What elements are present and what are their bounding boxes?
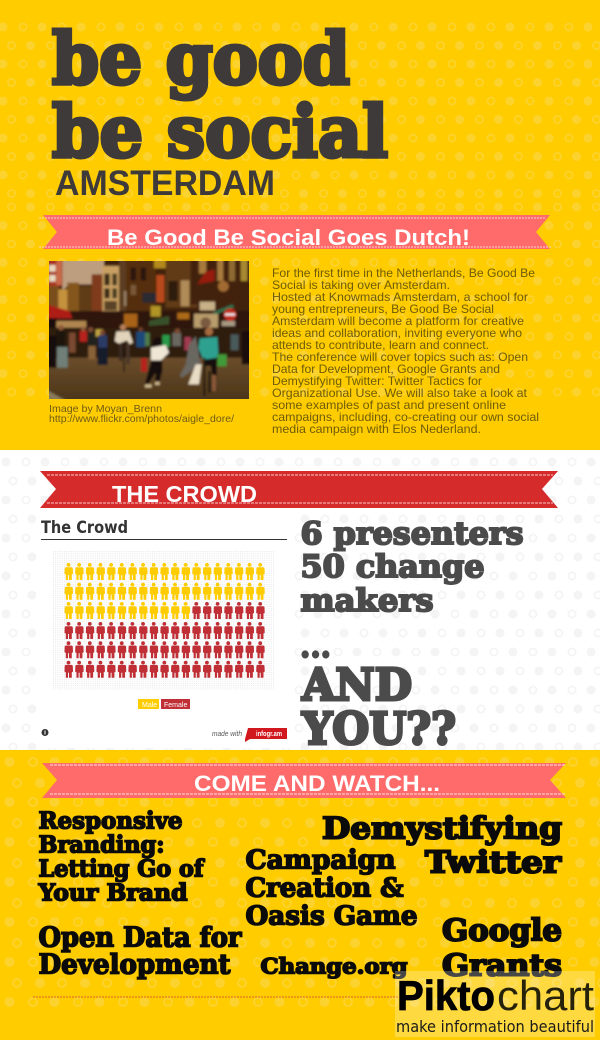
icon: info — [42, 729, 48, 736]
talk: open data for development: Development — [38, 950, 231, 980]
intro paragraph: Demystifying Twitter: Twitter Tactics for — [272, 374, 482, 388]
panel: crowd background — [0, 450, 600, 750]
crowd stats text: ... — [300, 626, 331, 665]
talk: responsive branding: Your Brand — [37, 880, 188, 906]
talk: google grants: Grants — [442, 948, 562, 984]
made with infogram badge: infogr.am — [256, 729, 282, 738]
crowd stats text: makers — [300, 583, 434, 619]
intro paragraph: Organizational Use. We will also take a look at — [272, 386, 528, 400]
legend — [138, 699, 190, 709]
photo credit — [49, 403, 234, 425]
piktochart watermark — [395, 971, 595, 1037]
dotted plot area — [53, 551, 275, 690]
intro paragraph: attends to contribute, learn and connect. — [272, 338, 489, 352]
made with infogram badge — [212, 728, 287, 742]
legend: Male — [142, 702, 157, 709]
crowd stats text — [300, 516, 524, 755]
talk: responsive branding — [37, 808, 206, 906]
ribbon: the crowd: THE CROWD — [112, 481, 257, 507]
panel: intro background — [0, 0, 600, 450]
talk: demystifying twitter — [322, 812, 562, 880]
subtitle: AMSTERDAM — [55, 164, 275, 203]
talk: google grants — [442, 914, 562, 984]
pictogram: male and female people — [64, 563, 265, 678]
dashed divider — [33, 996, 420, 998]
talk: campaign creation and oasis game: Campaign — [246, 846, 396, 876]
talk: open data for development: Open Data for — [38, 922, 242, 954]
intro paragraph: Hosted at Knowmads Amsterdam, a school for — [272, 290, 528, 304]
talk: responsive branding: Responsive — [38, 808, 182, 834]
title — [52, 16, 388, 174]
talk: responsive branding: Letting Go of — [38, 856, 206, 882]
ribbon: the crowd — [40, 471, 558, 508]
talk: campaign creation and oasis game — [246, 846, 418, 932]
logo wordmark: Pikto — [397, 972, 495, 1019]
intro paragraph: campaigns, including, co-creating our own social — [272, 410, 539, 424]
chart panel: the crowd pictogram — [36, 514, 291, 748]
intro paragraph: Amsterdam will become a platform for creative — [272, 314, 524, 328]
photo credit: http://www.flickr.com/photos/aigle_dore/ — [49, 413, 234, 425]
intro paragraph: Data for Development, Google Grants and — [272, 362, 500, 376]
intro paragraph: Social is taking over Amsterdam. — [272, 278, 450, 292]
talk: demystifying twitter: Twitter — [425, 846, 562, 880]
talk: demystifying twitter: Demystifying — [322, 812, 562, 846]
talk: campaign creation and oasis game: Oasis Game — [246, 902, 418, 932]
talk: campaign creation and oasis game: Creation & — [246, 874, 404, 904]
ribbon: come and watch — [42, 763, 566, 798]
crowd stats text: 6 presenters — [300, 516, 524, 552]
intro paragraph: some examples of past and present online — [272, 398, 506, 412]
talk: responsive branding: Branding: — [38, 832, 164, 858]
logo wordmark — [397, 972, 594, 1019]
crowd stats text: YOU?? — [301, 704, 456, 755]
crowd stats text: AND — [301, 660, 412, 711]
panel: talks background — [0, 750, 600, 1040]
heading rule — [41, 539, 287, 540]
intro paragraph — [272, 266, 539, 436]
intro paragraph: young entrepreneurs, Be Good Be Social — [272, 302, 494, 316]
intro paragraph: media campaign with Elos Nederland. — [272, 422, 481, 436]
made with infogram badge: made with — [212, 729, 242, 738]
title: be good — [52, 16, 350, 100]
photo: Amsterdam street scene — [49, 261, 249, 399]
chart heading: The Crowd — [41, 518, 128, 538]
talk: google grants: Google — [442, 914, 562, 948]
talk: change.org: Change.org — [260, 954, 408, 978]
ribbon: goes dutch: Be Good Be Social Goes Dutch! — [107, 225, 470, 250]
legend: Female — [164, 702, 187, 709]
title: be social — [52, 90, 388, 174]
talk: open data for development — [38, 922, 242, 980]
ribbon: come and watch: COME AND WATCH... — [194, 771, 440, 796]
intro paragraph: The conference will cover topics such as: Open — [272, 350, 528, 364]
ribbon: goes dutch — [39, 215, 551, 250]
logo wordmark: chart — [497, 972, 594, 1019]
intro paragraph: ideas and collaboration, inviting everyone who — [272, 326, 522, 340]
photo credit: Image by Moyan_Brenn — [49, 403, 162, 415]
crowd stats text: 50 change — [300, 549, 484, 585]
intro paragraph: For the first time in the Netherlands, Be Good Be — [272, 266, 535, 280]
